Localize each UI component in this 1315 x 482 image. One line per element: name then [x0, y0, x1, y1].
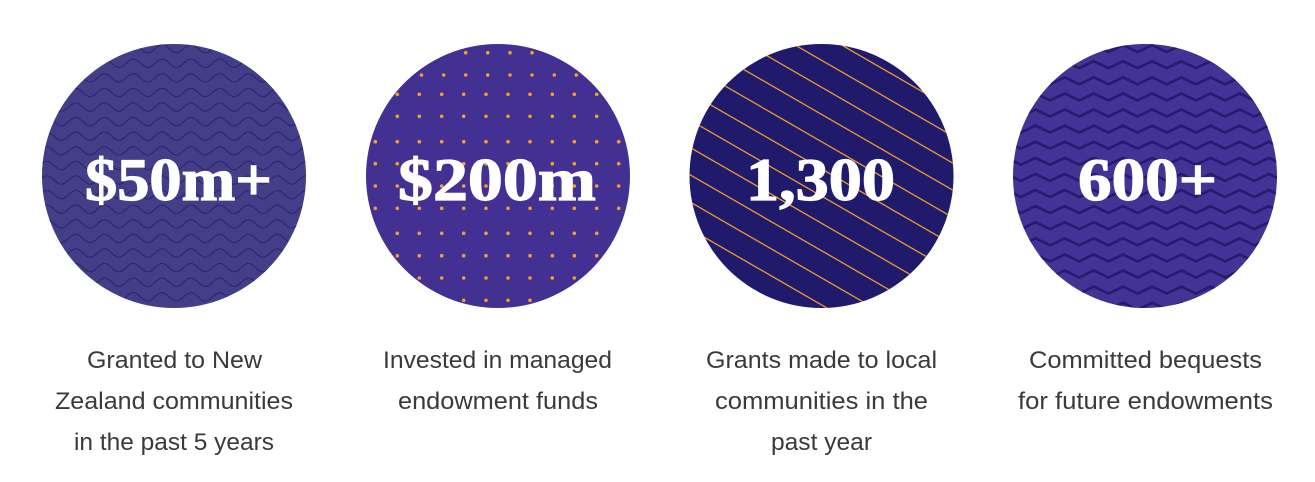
caption: granted: in the past 5 years: [74, 429, 274, 456]
panel: 1,300 grants: [690, 44, 954, 455]
stat: $50m+: $50m+: [85, 147, 272, 213]
stat: 600+: 600+: [1078, 147, 1217, 213]
stat: $200m: $200m: [398, 147, 596, 213]
panel: $50m+ granted: [42, 44, 306, 455]
caption: invested: endowment funds: [398, 388, 598, 415]
caption: granted: [55, 347, 293, 456]
caption: granted: Zealand communities: [55, 388, 293, 415]
caption: grants: Grants made to local: [706, 347, 937, 374]
stat: 1,300: 1,300: [746, 147, 895, 213]
caption: invested: [383, 347, 612, 415]
caption: grants: past year: [771, 429, 872, 456]
caption: granted: Granted to New: [87, 347, 263, 374]
panel: 600+ bequests: [1013, 44, 1277, 409]
circle with diagonal line pattern: [690, 44, 954, 308]
caption: bequests: [1018, 347, 1273, 415]
circle with wave pattern: [42, 44, 306, 308]
caption: bequests: for future endowments: [1018, 388, 1273, 415]
caption: grants: [706, 347, 937, 456]
caption: invested: Invested in managed: [383, 347, 612, 374]
caption: bequests: Committed bequests: [1029, 347, 1262, 374]
circle with dot pattern: [366, 44, 630, 308]
caption: grants: communities in the: [715, 388, 928, 415]
panel: $200m invested: [366, 44, 630, 415]
circle with zigzag pattern: [1013, 44, 1277, 308]
